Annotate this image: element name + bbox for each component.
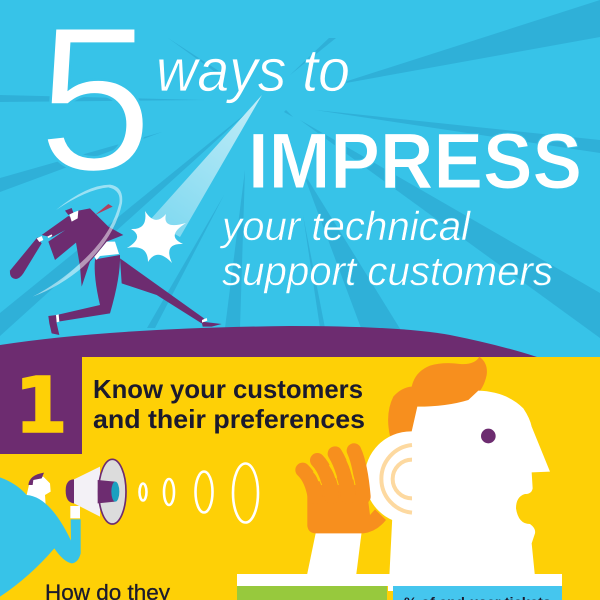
notch <box>388 586 393 591</box>
listening man <box>303 357 550 577</box>
socks <box>56 314 207 323</box>
subtitle: your technical support customers: your technical <box>219 203 472 249</box>
section heading <box>93 374 365 434</box>
megaphone person <box>0 459 126 597</box>
cyan panel with caption <box>393 586 562 600</box>
ear whorls <box>381 445 412 513</box>
hair <box>65 208 73 215</box>
section heading: Know your customers <box>93 374 363 404</box>
batter figure <box>10 185 222 335</box>
shoes <box>48 315 222 335</box>
white table strip <box>237 574 562 586</box>
sound waves <box>140 464 258 522</box>
cupped hand <box>303 451 386 533</box>
swing arc <box>33 185 122 297</box>
head <box>69 211 78 222</box>
title: ways to: ways to <box>156 37 350 104</box>
arm <box>307 532 362 577</box>
subtitle: your technical support customers: support customers <box>222 248 553 294</box>
shorts <box>94 242 119 260</box>
person head <box>27 477 51 505</box>
light beam from the ball <box>150 95 262 237</box>
section heading: and their preferences <box>93 404 365 434</box>
hair <box>388 357 487 436</box>
eye <box>481 429 496 443</box>
front leg <box>57 255 120 322</box>
necktie <box>95 204 113 215</box>
torso and arms <box>42 208 123 287</box>
title: IMPRESS: IMPRESS <box>248 116 582 205</box>
number badge <box>0 357 82 454</box>
yellow section background <box>0 357 600 600</box>
hands <box>37 234 52 242</box>
sunburst rays <box>0 0 600 338</box>
purple hill <box>0 326 537 357</box>
head <box>389 391 550 577</box>
person body <box>0 477 81 597</box>
baseball bat <box>10 237 42 279</box>
number badge: 1 <box>14 362 68 451</box>
impact star <box>127 211 186 263</box>
person hair <box>28 473 44 485</box>
green panel <box>237 586 387 600</box>
hand <box>70 506 80 518</box>
ear <box>365 431 457 524</box>
megaphone <box>66 459 126 524</box>
back leg <box>120 258 204 323</box>
subtitle: your technical support customers <box>219 203 553 294</box>
